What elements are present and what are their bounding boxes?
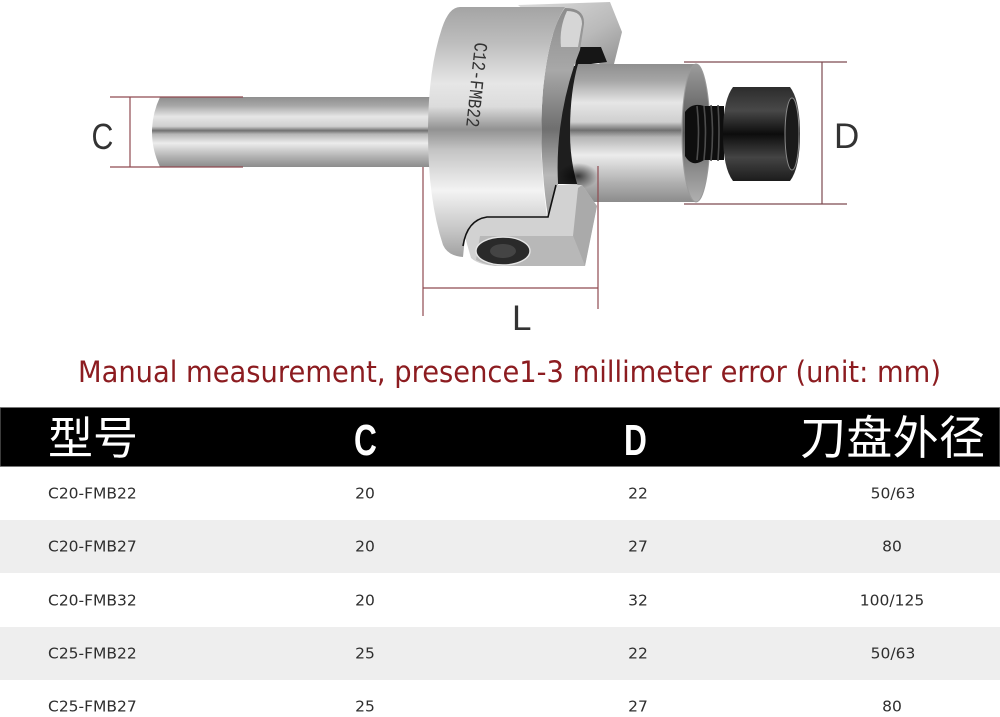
key slot line	[463, 185, 556, 246]
row C20-FMB22: C20-FMB22	[48, 484, 137, 502]
groove behind collar	[558, 64, 584, 184]
bottom drive key	[465, 185, 597, 266]
row C20-FMB32: 32	[628, 592, 648, 610]
measurement note: Manual measurement, presence1-3 millimeter error (unit: mm)	[78, 355, 941, 389]
row C20-FMB27: C20-FMB27	[48, 538, 137, 556]
table header: D	[624, 416, 647, 465]
row stripes	[0, 520, 1000, 680]
clamp screw	[476, 237, 530, 265]
disk slot	[561, 11, 582, 47]
table header: C	[354, 416, 377, 465]
row C20-FMB22: 50/63	[871, 484, 915, 502]
row C20-FMB27	[48, 538, 902, 556]
row C25-FMB27: 80	[882, 698, 902, 716]
collar contact shadow	[558, 163, 598, 189]
table header: 型号	[48, 413, 138, 464]
row C25-FMB22: C25-FMB22	[48, 644, 137, 662]
disk flange	[541, 8, 584, 217]
dark key seat	[575, 47, 607, 66]
top drive key	[518, 2, 622, 64]
screw hex socket	[785, 98, 799, 170]
table header: 刀盘外径	[800, 412, 985, 464]
row C20-FMB27: 27	[628, 538, 648, 556]
socket head screw	[723, 87, 800, 181]
row C20-FMB22: 22	[628, 484, 648, 502]
cutter disk front	[428, 7, 565, 257]
row C20-FMB22: 20	[355, 484, 375, 502]
thread	[685, 105, 724, 163]
dimension L	[423, 166, 598, 338]
hex socket	[490, 244, 516, 258]
row C25-FMB22	[48, 644, 915, 662]
specification table	[0, 408, 1000, 716]
key side face	[573, 185, 597, 266]
dimension D	[684, 62, 859, 204]
tool photo: face mill arbor	[152, 2, 800, 266]
row C20-FMB27: 20	[355, 538, 375, 556]
row C20-FMB22	[48, 484, 915, 502]
row C25-FMB22: 50/63	[871, 644, 915, 662]
key lower face	[476, 236, 585, 266]
row C20-FMB32: C20-FMB32	[48, 592, 137, 610]
collar end face	[682, 64, 710, 202]
table rows	[48, 484, 924, 716]
row C25-FMB27: 27	[628, 698, 648, 716]
collar	[570, 64, 696, 202]
row C25-FMB22: 25	[355, 644, 375, 662]
row C20-FMB32: 20	[355, 592, 375, 610]
row C25-FMB27: 25	[355, 698, 375, 716]
row C25-FMB27	[48, 698, 902, 716]
row C25-FMB22: 22	[628, 644, 648, 662]
dimension D: D	[834, 117, 859, 156]
table header	[0, 408, 1000, 466]
shank	[152, 97, 430, 167]
row C20-FMB27: 80	[882, 538, 902, 556]
dimension L: L	[512, 299, 531, 338]
row C20-FMB32: 100/125	[860, 592, 924, 610]
dimension C	[92, 97, 243, 167]
row C25-FMB27: C25-FMB27	[48, 698, 137, 716]
dimension C: C	[92, 118, 113, 158]
engraved model mark: C12-FMB22	[460, 41, 491, 128]
row C20-FMB32	[48, 592, 924, 610]
